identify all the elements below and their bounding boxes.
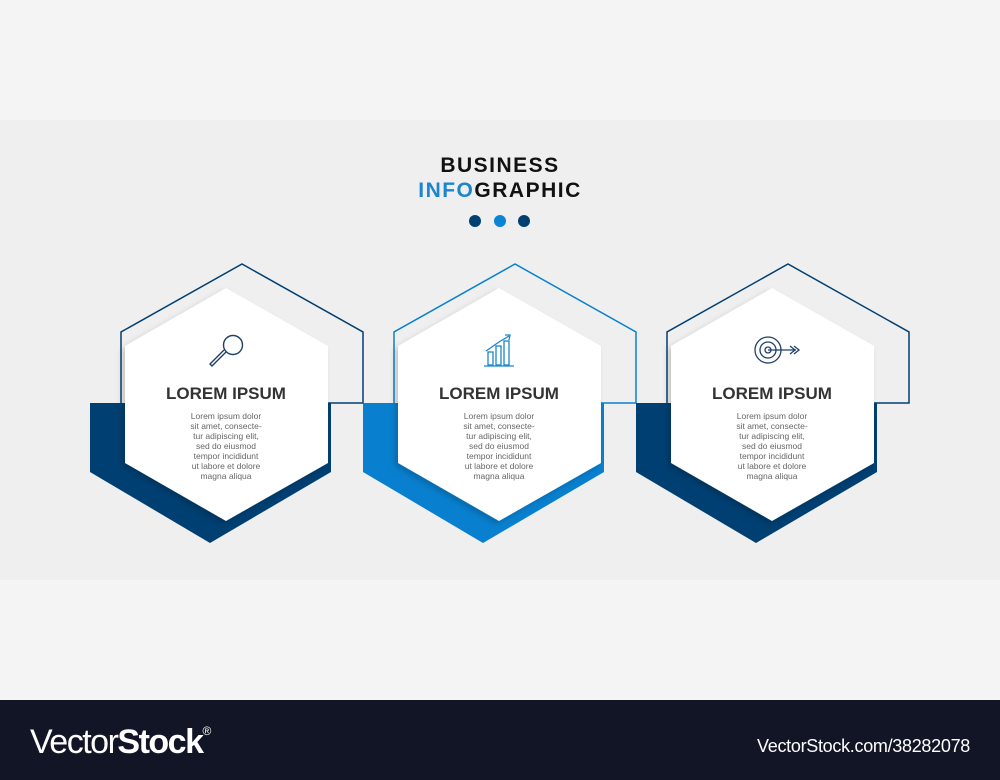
text block: ut labore et dolore [192, 461, 261, 471]
text block: sed do eiusmod [196, 441, 256, 451]
text block: tempor incididunt [740, 451, 805, 461]
text block: tur adipiscing elit, [739, 431, 805, 441]
panel: step 3 [636, 264, 909, 543]
panel: step 1 [90, 264, 363, 543]
footer: VectorStock [30, 723, 202, 761]
footer: VectorStock.com/38282078 [757, 736, 970, 756]
text block: sit amet, consecte- [190, 421, 262, 431]
title [418, 154, 582, 202]
text block: tempor incididunt [194, 451, 259, 461]
text block: tur adipiscing elit, [466, 431, 532, 441]
text block: ut labore et dolore [465, 461, 534, 471]
text block [463, 411, 535, 481]
heading: LOREM IPSUM [166, 384, 286, 403]
text block: tempor incididunt [467, 451, 532, 461]
icon: target [755, 337, 799, 363]
heading: LOREM IPSUM [712, 384, 832, 403]
text block: Lorem ipsum dolor [737, 411, 807, 421]
text block: Lorem ipsum dolor [464, 411, 534, 421]
panel: step 2 [363, 264, 636, 543]
text block: magna aliqua [746, 471, 798, 481]
text block [190, 411, 262, 481]
text block: sit amet, consecte- [736, 421, 808, 431]
text block: sit amet, consecte- [463, 421, 535, 431]
title: INFOGRAPHIC [418, 179, 582, 202]
text block: sed do eiusmod [742, 441, 802, 451]
text block [736, 411, 808, 481]
text block: tur adipiscing elit, [193, 431, 259, 441]
text block: sed do eiusmod [469, 441, 529, 451]
text block: Lorem ipsum dolor [191, 411, 261, 421]
footer [0, 700, 1000, 780]
icon: bar chart [484, 335, 514, 366]
text block: ut labore et dolore [738, 461, 807, 471]
title: BUSINESS [440, 154, 560, 177]
text block: magna aliqua [200, 471, 252, 481]
text block: magna aliqua [473, 471, 525, 481]
dots [469, 215, 530, 227]
footer: ® [202, 724, 211, 738]
heading: LOREM IPSUM [439, 384, 559, 403]
icon: magnifier [210, 336, 242, 366]
